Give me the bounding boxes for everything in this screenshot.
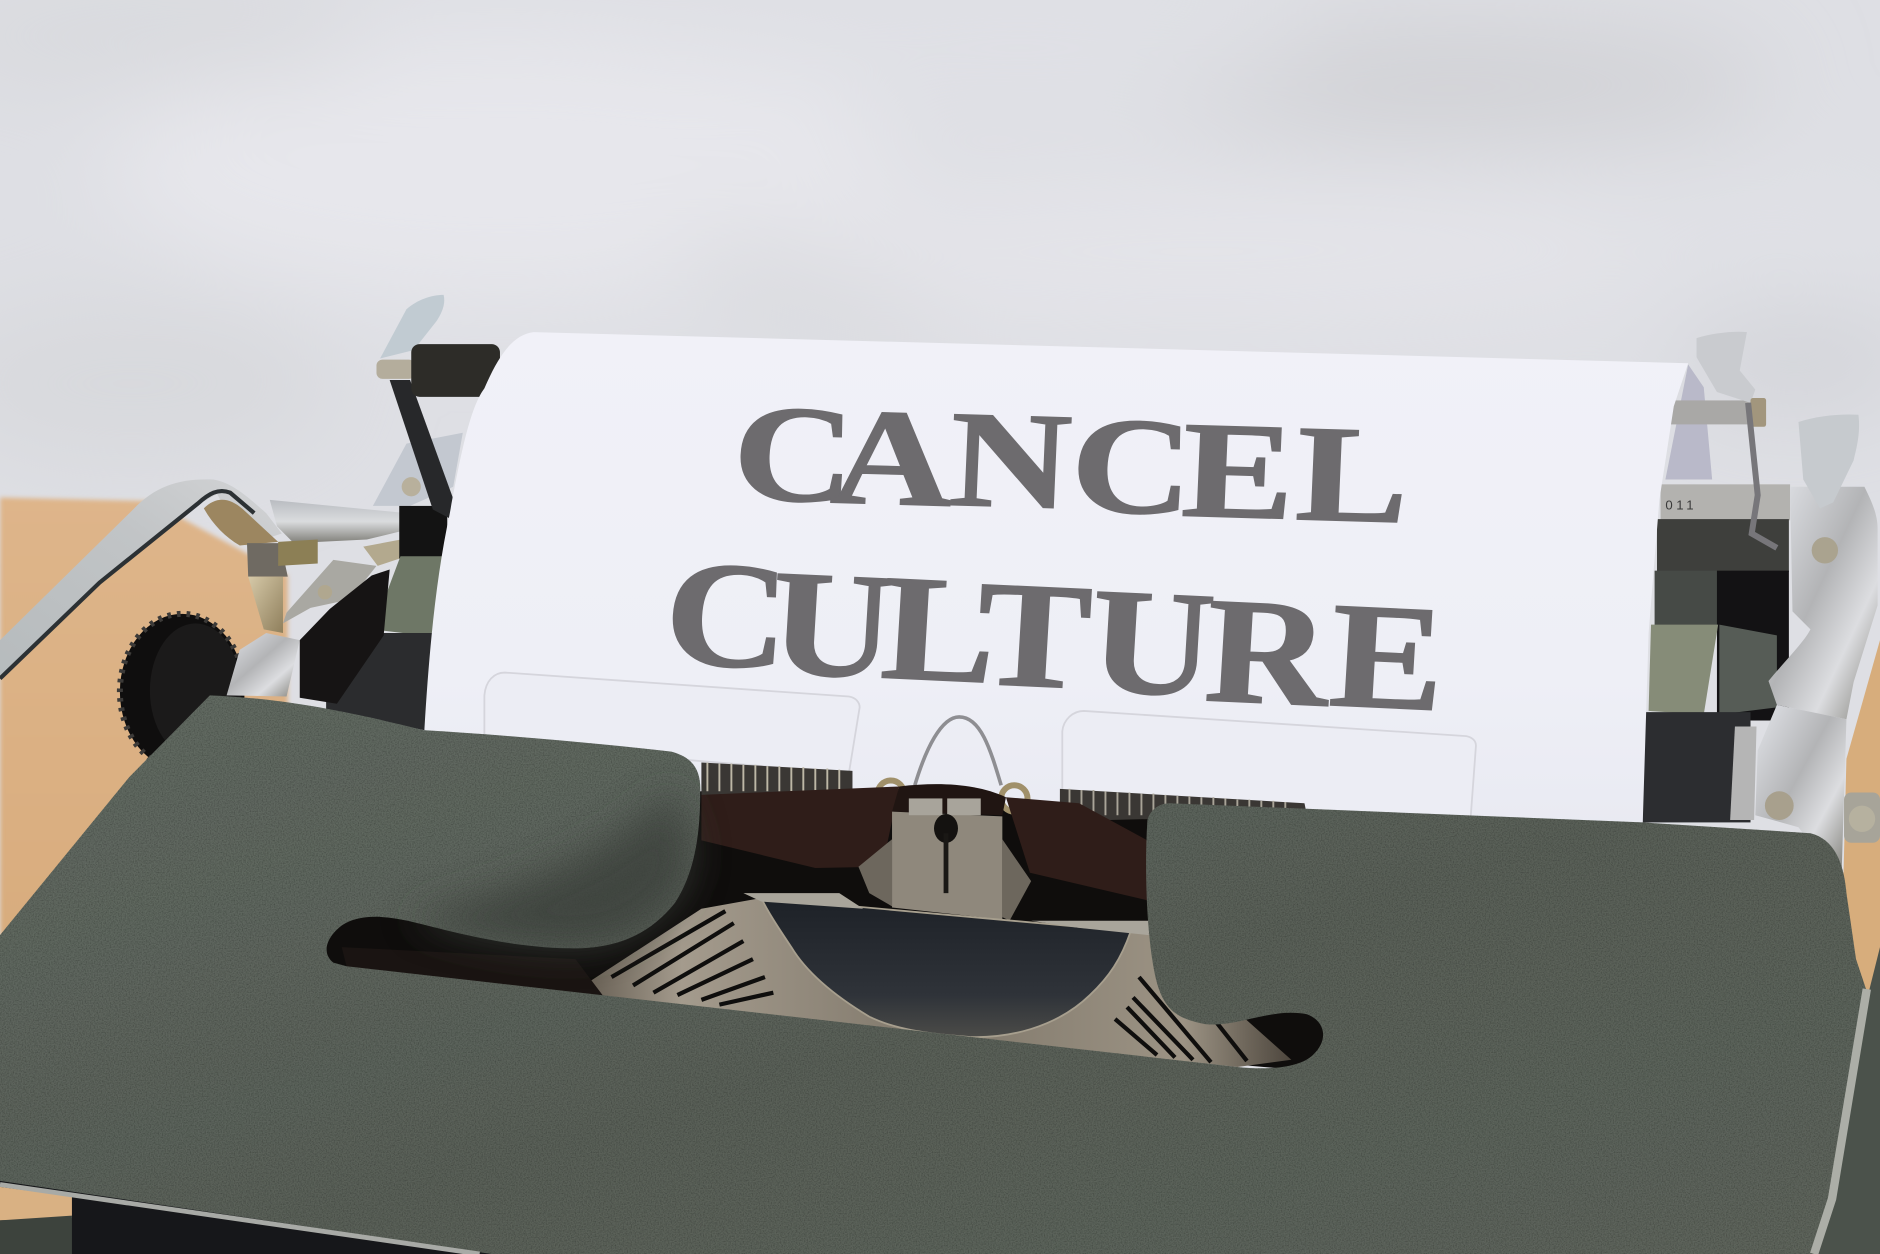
wing shadow — [408, 791, 691, 948]
dark cylinder — [1657, 519, 1789, 572]
nut — [1751, 398, 1766, 427]
dark cavity — [324, 791, 1331, 1073]
bail ticks left — [701, 762, 852, 797]
type guide — [858, 798, 1031, 921]
gears — [300, 569, 390, 704]
carriage return lever — [0, 479, 282, 679]
typewriter cover — [0, 695, 1880, 1254]
screw upper — [1812, 537, 1838, 563]
line: cancel: CANCEL — [730, 377, 1412, 553]
cover body — [0, 695, 1868, 1254]
scale bar — [1661, 484, 1790, 520]
line: culture: CULTURE — [661, 528, 1449, 743]
sheet — [424, 332, 1688, 827]
white ring — [1730, 727, 1757, 820]
clear plate right — [1062, 711, 1476, 827]
chrome plates — [247, 500, 414, 633]
dark block — [1655, 571, 1731, 626]
chrome collar — [227, 633, 300, 697]
dark dish — [761, 898, 1131, 1037]
green block — [373, 556, 446, 637]
screw — [402, 477, 421, 496]
basket shadow — [342, 947, 611, 1007]
ribbon left — [701, 786, 899, 868]
paper sheet — [424, 332, 1688, 827]
right platen — [1643, 712, 1751, 822]
wire paper guide — [915, 717, 1001, 785]
ribbon right — [1006, 797, 1147, 900]
blade — [1697, 332, 1755, 403]
type segment — [574, 898, 1291, 1067]
clear plate left — [484, 673, 860, 773]
lever pivot — [376, 360, 415, 379]
mechanism — [1717, 571, 1789, 721]
screw lower — [1765, 791, 1794, 820]
gold rings — [878, 780, 1028, 812]
rod — [1670, 400, 1754, 424]
right carriage mechanism — [1643, 332, 1880, 873]
rear light plate — [373, 433, 463, 506]
chrome upper body — [1768, 487, 1878, 719]
arm — [1748, 403, 1777, 548]
chrome strip right — [1814, 989, 1867, 1254]
scale bar: 011 — [1665, 498, 1697, 513]
black strap — [390, 380, 453, 520]
typewriter interior — [324, 717, 1331, 1073]
ribbon centre — [892, 784, 1006, 815]
base edge — [0, 1175, 504, 1254]
page heading — [661, 377, 1449, 743]
left carriage mechanism — [0, 295, 500, 770]
right panel — [1816, 947, 1880, 1254]
paper back shade — [1665, 364, 1712, 480]
paper release lever blade — [380, 295, 444, 358]
bail ticks right — [1060, 789, 1307, 821]
roller — [411, 344, 500, 397]
chrome lower body — [1755, 705, 1846, 873]
dark gap — [399, 506, 447, 559]
light green plate — [1649, 625, 1718, 715]
wooden table — [0, 498, 1880, 995]
chrome strip bottom — [0, 1184, 480, 1254]
back plate — [743, 893, 1151, 935]
blade two — [1798, 415, 1859, 508]
left platen — [326, 633, 434, 731]
knob — [120, 614, 245, 770]
side screw — [1844, 792, 1880, 843]
gear housing — [1719, 625, 1777, 715]
